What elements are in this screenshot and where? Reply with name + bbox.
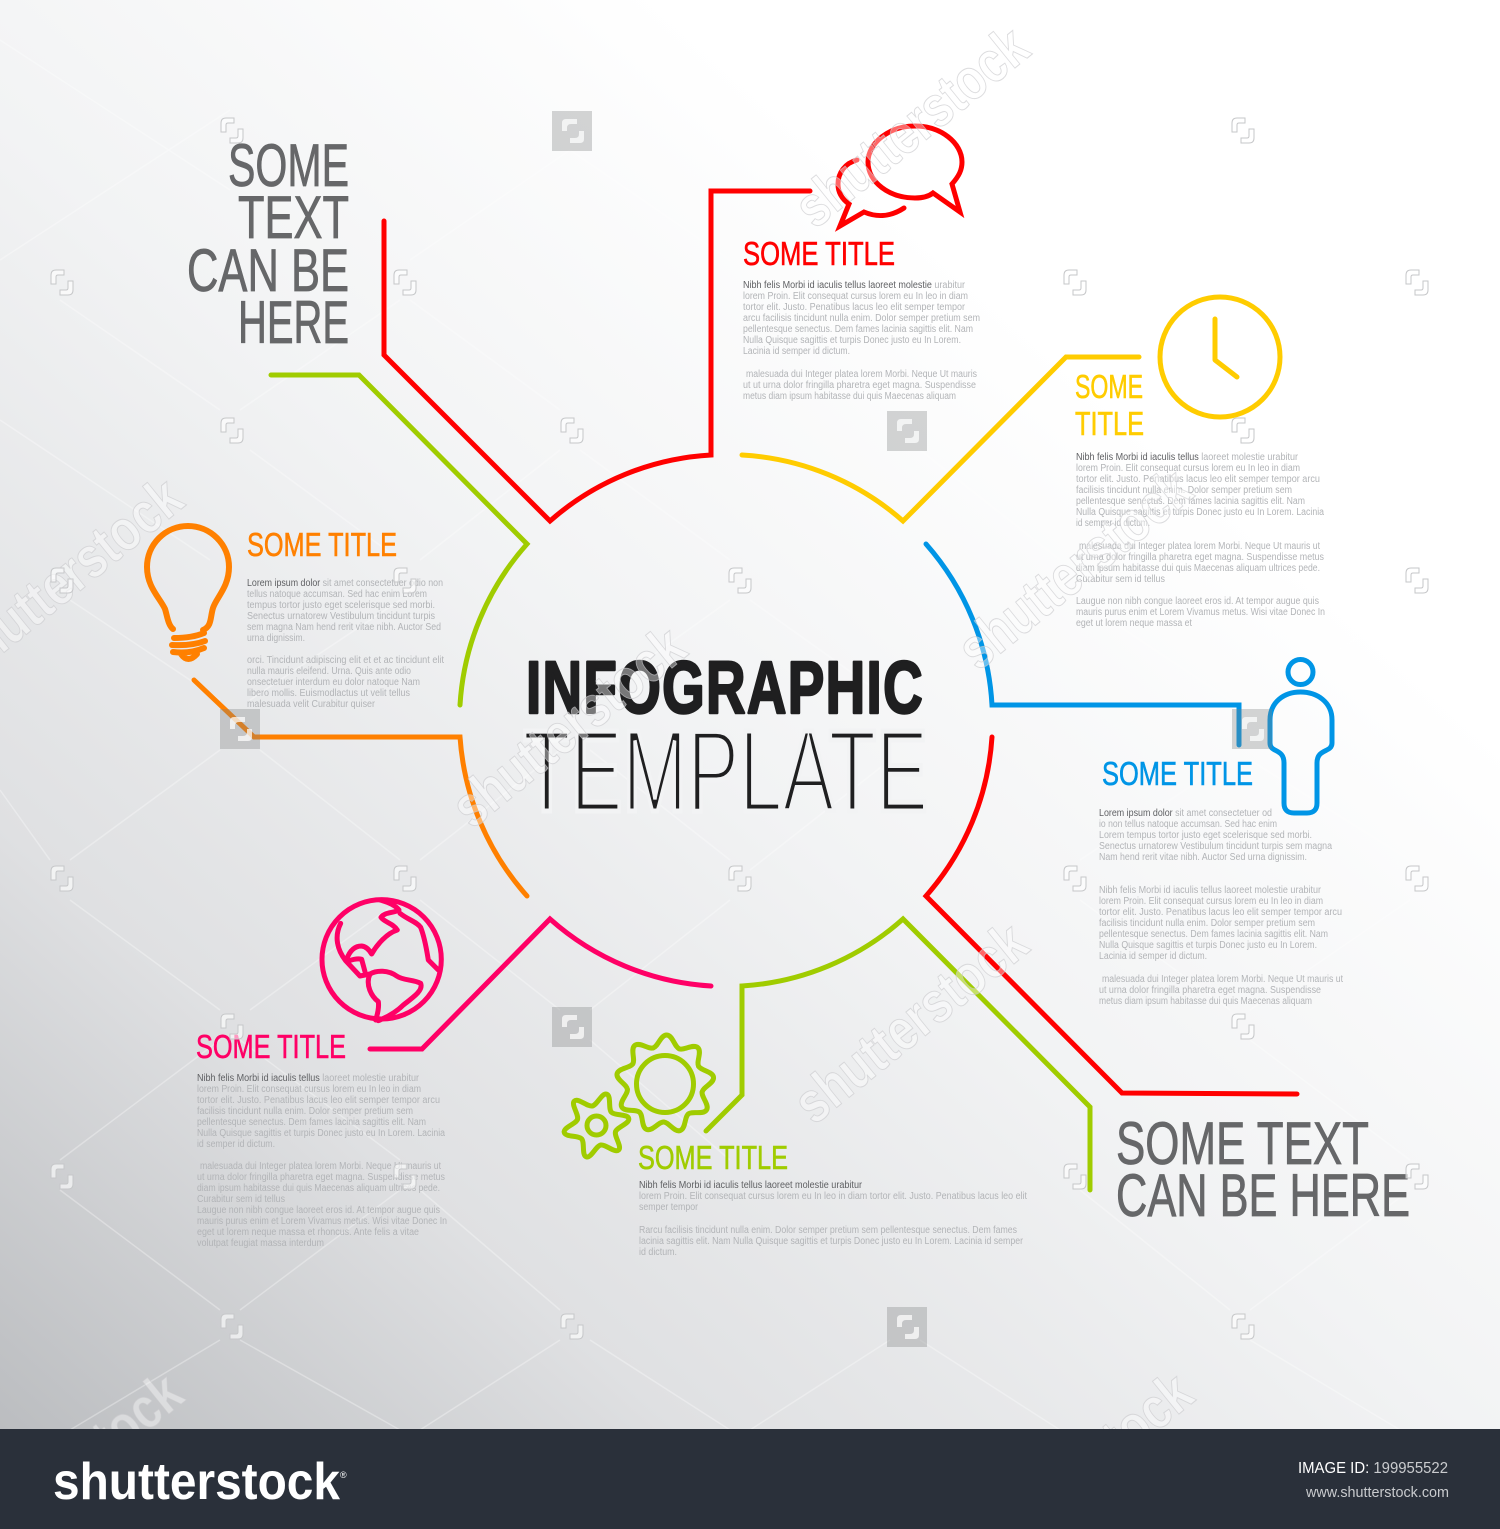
text block: blue (1099, 808, 1343, 1007)
text block: orange: libero mollis. Euismodlactus ut velit tellus (247, 688, 410, 699)
text block: yellow: malesuada dui Integer platea lorem Morbi. Neque Ut mauris ut (1079, 541, 1320, 552)
connector line: lime top left (271, 375, 527, 705)
watermark: grey square logo marks (220, 111, 1272, 1347)
icon: gears (562, 1035, 715, 1160)
title: green: SOME TITLE (638, 1139, 788, 1176)
icon: person (1270, 660, 1332, 813)
text block: yellow: tortor elit. Justo. Penatibus lacus leo elit semper tempor arcu (1076, 474, 1320, 485)
footer image id: IMAGE ID: 199955522 (1298, 1460, 1448, 1477)
text block: blue: ut urna dolor fringilla pharetra eget magna. Suspendisse (1099, 985, 1321, 996)
text block: blue: tortor elit. Justo. Penatibus lacus leo elit semper tempor arcu (1099, 907, 1342, 918)
text block: pink: diam ipsum habitasse dui quis Maecenas aliquam ultrices pede. (197, 1183, 440, 1194)
text block: orange: sem magna Nam hend rerit vitae nibh. Auctor Sed (247, 622, 441, 633)
connector line: lime bottom (706, 919, 1090, 1190)
heading: INFOGRAPHIC: INFOGRAPHIC (526, 646, 923, 729)
text block: orange: nulla mauris eleifend. Urna. Quis ante odio (247, 666, 411, 677)
text block: blue: Nulla Quisque sagittis et turpis Donec justo eu In Lorem. (1099, 940, 1317, 951)
text block: pink: id semper id dictum. (197, 1139, 275, 1150)
text block: blue: malesuada dui Integer platea lorem Morbi. Neque Ut mauris ut (1102, 974, 1343, 985)
text block: green: Rarcu facilisis tincidunt nulla enim. Dolor semper pretium sem pellentesque senectus. Dem fames (639, 1225, 1017, 1236)
text block: blue: Lacinia id semper id dictum. (1099, 951, 1207, 962)
connector line: red top left and top arc (384, 191, 810, 521)
text block: red: lorem Proin. Elit consequat cursus lorem eu In leo in diam (743, 291, 968, 302)
text block: pink: Curabitur sem id tellus (197, 1194, 285, 1205)
text block: orange (247, 578, 444, 710)
text block: green: lacinia sagittis elit. Nam Nulla Quisque sagittis et turpis Donec justo eu In Lorem. Lacinia id semper (639, 1236, 1024, 1247)
big text: bottom right (1116, 1110, 1410, 1229)
text block: red: Nulla Quisque sagittis et turpis Donec justo eu In Lorem. (743, 335, 961, 346)
text block: orange: malesuada velit Curabitur quiser (247, 699, 376, 710)
heading: TEMPLATE: TEMPLATE (523, 706, 928, 836)
title: orange: SOME TITLE (247, 526, 397, 563)
watermark: rotated shutterstock text: shutterstock (781, 909, 1040, 1136)
big text: top left: HERE (238, 289, 349, 356)
icon: light bulb (147, 526, 229, 659)
connector line: orange (194, 680, 527, 896)
footer url: www.shutterstock.com (1305, 1484, 1449, 1501)
title: red: SOME TITLE (743, 235, 895, 272)
title: blue: SOME TITLE (1102, 755, 1253, 792)
text block: pink: eget ut lorem neque massa et rhoncus. Ante felis a vitae (197, 1227, 419, 1238)
text block: orange: tellus natoque accumsan. Sed hac enim Lorem (247, 589, 427, 600)
text block: red: metus diam ipsum habitasse dui quis Maecenas aliquam (743, 391, 956, 402)
text block: green: id dictum. (639, 1247, 677, 1258)
text block: blue: pellentesque senectus. Dem fames lacinia sagittis elit. Nam (1099, 929, 1328, 940)
text block: red: Lacinia id semper id dictum. (743, 346, 850, 357)
text block: blue: io non tellus natoque accumsan. Sed hac enim (1099, 819, 1277, 830)
text block: blue: Nibh felis Morbi id iaculis tellus laoreet molestie urabitur (1099, 885, 1322, 896)
text block: yellow: mauris purus enim et Lorem Vivamus metus. Wisi vitae Donec In (1076, 607, 1325, 618)
text block: blue: Nam hend rerit vitae nibh. Auctor Sed urna dignissim. (1099, 852, 1307, 863)
text block: orange: Lorem ipsum dolor sit amet consectetuer odio non (247, 578, 443, 589)
footer bar (0, 1429, 1500, 1529)
text block: yellow: eget ut lorem neque massa et (1076, 618, 1192, 629)
text block: pink: lorem Proin. Elit consequat cursus lorem eu In leo in diam (197, 1084, 421, 1095)
text block: yellow: Nibh felis Morbi id iaculis tellus laoreet molestie urabitur (1076, 452, 1299, 463)
text block: pink: ut urna dolor fringilla pharetra eget magna. Suspendisse metus (197, 1172, 445, 1183)
text block: green: semper tempor (639, 1202, 699, 1213)
text block: orange: orci. Tincidunt adipiscing elit et et ac tincidunt elit (247, 655, 444, 666)
text block: red (743, 280, 980, 402)
connector line: pink (370, 919, 711, 1049)
text block: blue: Lorem tempus tortor justo eget scelerisque sed morbi. (1099, 830, 1312, 841)
text block: pink: Laugue non nibh congue laoreet eros id. At tempor augue quis (197, 1205, 440, 1216)
title: pink: SOME TITLE (196, 1028, 346, 1065)
text block: red: Nibh felis Morbi id iaculis tellus laoreet molestie urabitur (743, 280, 966, 291)
connector line: red bottom right (926, 737, 1297, 1094)
footer logo: shutterstock (53, 1453, 340, 1511)
text block: yellow: Nulla Quisque sagittis et turpis Donec justo eu In Lorem. Lacinia (1076, 507, 1324, 518)
watermark: rotated shutterstock text (0, 13, 1205, 1529)
big text: top left: CAN BE (187, 237, 349, 304)
watermark: rotated shutterstock text: shutterstock (439, 613, 698, 840)
title: yellow (1075, 368, 1144, 442)
big text: top left: TEXT (238, 184, 349, 251)
connector line: yellow (742, 357, 1139, 521)
watermark: rotated shutterstock text: shutterstock (945, 455, 1204, 682)
text block: blue: lorem Proin. Elit consequat cursus lorem eu In leo in diam (1099, 896, 1323, 907)
big text: bottom right: SOME TEXT (1116, 1110, 1369, 1177)
connector line: blue (926, 544, 1239, 745)
text block: blue: metus diam ipsum habitasse dui quis Maecenas aliquam (1099, 996, 1312, 1007)
text block: pink: Nibh felis Morbi id iaculis tellus laoreet molestie urabitur (197, 1073, 420, 1084)
text block: orange: urna dignissim. (247, 633, 305, 644)
text block: yellow: diam ipsum habitasse dui quis Maecenas aliquam ultrices pede. (1076, 563, 1320, 574)
text block: green: lorem Proin. Elit consequat cursus lorem eu In leo in diam tortor elit. Justo. Penatibus lacus leo elit (639, 1191, 1027, 1202)
big text: top left (187, 132, 349, 356)
text block: red: tortor elit. Justo. Penatibus lacus leo elit semper tempor (743, 302, 966, 313)
text block: orange: tempus tortor justo eget scelerisque sed morbi. (247, 600, 435, 611)
footer registered mark: ® (340, 1470, 347, 1480)
text block: yellow: id semper id dictum. (1076, 518, 1150, 529)
text block: red: malesuada dui Integer platea lorem Morbi. Neque Ut mauris (746, 369, 977, 380)
text block: yellow: ut urna dolor fringilla pharetra eget magna. Suspendisse metus (1076, 552, 1324, 563)
text block: green (639, 1180, 1027, 1258)
icon: globe (322, 900, 441, 1021)
text block: yellow: Laugue non nibh congue laoreet eros id. At tempor augue quis (1076, 596, 1319, 607)
title: yellow: SOME (1075, 368, 1143, 405)
text block: orange: onsectetuer interdum eu dolor natoque Nam (247, 677, 420, 688)
text block: pink (197, 1073, 447, 1249)
text block: yellow (1076, 452, 1325, 629)
icon: speech bubbles (838, 126, 962, 226)
text block: pink: mauris purus enim et Lorem Vivamus metus. Wisi vitae Donec In (197, 1216, 447, 1227)
watermark: small logo marks (51, 118, 1428, 1339)
text block: yellow: lorem Proin. Elit consequat cursus lorem eu In leo in diam (1076, 463, 1300, 474)
icon: clock (1160, 297, 1280, 417)
text block: pink: pellentesque senectus. Dem fames lacinia sagittis elit. Nam (197, 1117, 426, 1128)
text block: pink: tortor elit. Justo. Penatibus lacus leo elit semper tempor arcu (197, 1095, 440, 1106)
text block: pink: volutpat feugiat massa interdum (197, 1238, 324, 1249)
text block: red: pellentesque senectus. Dem fames lacinia sagittis elit. Nam (743, 324, 973, 335)
main heading (523, 646, 928, 836)
text block: pink: facilisis tincidunt nulla enim. Dolor semper pretium sem (197, 1106, 413, 1117)
text block: orange: Senectus urnatorew Vestibulum tincidunt turpis (247, 611, 435, 622)
text block: yellow: Curabitur sem id tellus (1076, 574, 1165, 585)
text block: pink: Nulla Quisque sagittis et turpis Donec justo eu In Lorem. Lacinia (197, 1128, 445, 1139)
title: yellow: TITLE (1075, 405, 1144, 442)
text block: blue: facilisis tincidunt nulla enim. Dolor semper pretium sem (1099, 918, 1315, 929)
text block: blue: Senectus urnatorew Vestibulum tincidunt turpis sem magna (1099, 841, 1332, 852)
text block: red: arcu facilisis tincidunt nulla enim. Dolor semper pretium sem (743, 313, 980, 324)
text block: yellow: pellentesque senectus. Dem fames lacinia sagittis elit. Nam (1076, 496, 1305, 507)
big text: top left: SOME (228, 132, 349, 199)
text block: yellow: facilisis tincidunt nulla enim. Dolor semper pretium sem (1076, 485, 1292, 496)
text block: blue: Lorem ipsum dolor sit amet consectetuer od (1099, 808, 1272, 819)
text block: pink: malesuada dui Integer platea lorem Morbi. Neque Ut mauris ut (200, 1161, 441, 1172)
text block: green: Nibh felis Morbi id iaculis tellus laoreet molestie urabitur (639, 1180, 863, 1191)
text block: red: ut ut urna dolor fringilla pharetra eget magna. Suspendisse (743, 380, 976, 391)
